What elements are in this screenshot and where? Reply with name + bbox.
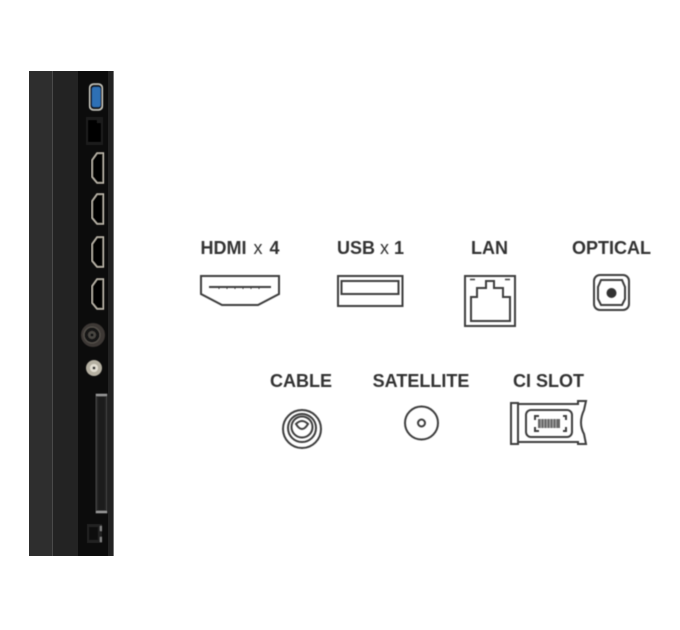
item: optical [572, 238, 651, 310]
label: LAN: LAN [471, 238, 508, 258]
port: USB [90, 84, 102, 110]
port: optical [87, 524, 102, 543]
label: CABLE: CABLE [270, 371, 332, 391]
icon: HDMI [201, 276, 279, 305]
item: USB [337, 238, 404, 306]
icon: optical [594, 275, 629, 310]
item: LAN [465, 238, 515, 326]
port: satellite [86, 360, 102, 376]
icon: USB [338, 276, 402, 306]
icon: LAN [465, 276, 515, 326]
label: SATELLITE: SATELLITE [373, 371, 469, 391]
icon: CI slot [511, 401, 586, 444]
item: cable [270, 371, 332, 448]
port: HDMI 1 [92, 153, 104, 183]
panel: TV side ports [29, 71, 114, 556]
label: OPTICAL: OPTICAL [572, 238, 651, 258]
label: HDMI x 4: HDMI x 4 [200, 238, 280, 258]
icon: cable [283, 410, 321, 448]
port: LAN [86, 117, 103, 145]
item: CI slot [511, 371, 586, 444]
port: HDMI 2 [92, 194, 104, 224]
label: CI SLOT: CI SLOT [513, 371, 584, 391]
port: CI slot [96, 394, 107, 513]
port: HDMI 3 [92, 237, 104, 267]
item: satellite [373, 371, 469, 440]
label: USB x 1: USB x 1 [337, 238, 404, 258]
icon: satellite [405, 406, 438, 440]
port: cable [81, 323, 105, 347]
port: HDMI 4 [92, 279, 104, 309]
item: HDMI [200, 238, 280, 305]
